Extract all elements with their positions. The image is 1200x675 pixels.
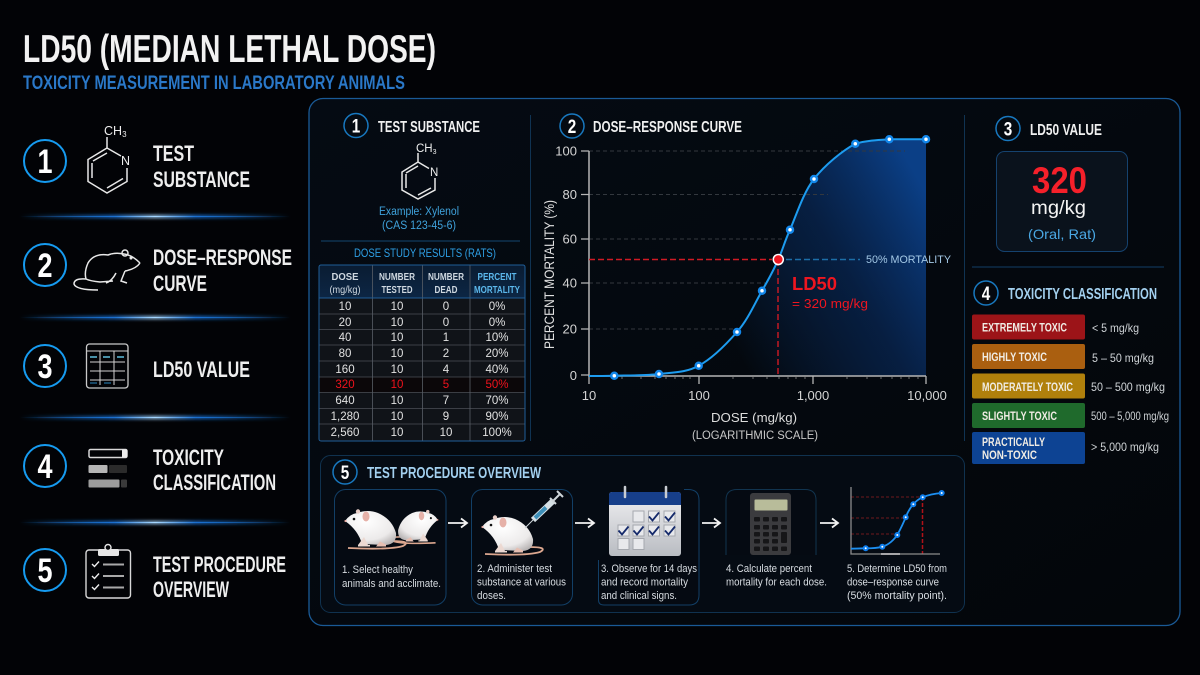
x axis labels (582, 388, 947, 403)
class: highly toxic: 5 – 50 mg/kg (1092, 351, 1154, 365)
icon: clipboard (86, 544, 130, 598)
dose study table: (mg/kg) (330, 284, 360, 296)
y axis labels: 60 (563, 232, 577, 246)
panel: dose-response curve (542, 114, 952, 442)
class: highly toxic (972, 344, 1154, 369)
dose study table: 20% (485, 348, 509, 360)
icon: molecule (88, 124, 130, 193)
step 2 (472, 490, 572, 605)
dose study table: 0% (489, 317, 505, 329)
panel: dose-response curve: 2 (568, 117, 576, 138)
class: slightly toxic (972, 403, 1169, 428)
step 5: (50% mortality point). (847, 590, 947, 602)
main panel (309, 98, 1180, 626)
y axis labels: 100 (555, 144, 577, 158)
class: practically non-toxic: PRACTICALLY (982, 435, 1045, 449)
dose study table: DOSE (332, 271, 358, 283)
substance caption: Example: Xylenol (379, 206, 459, 218)
dose study table: 320 (335, 379, 355, 391)
dose study table: 10 (391, 301, 403, 313)
dose study table: TESTED (382, 284, 413, 296)
class: practically non-toxic: > 5,000 mg/kg (1091, 440, 1159, 454)
panel: test procedure overview: TEST PROCEDURE OVERVIEW (367, 465, 542, 482)
y axis labels: 20 (563, 322, 577, 336)
icon: two rats (344, 509, 438, 549)
dose study table: 0 (443, 317, 449, 329)
sidebar item 1: test substance: TEST (153, 141, 194, 166)
dose study table: 640 (335, 395, 355, 407)
icon: rat with syringe (481, 491, 563, 555)
sidebar item 1: test substance: 1 (38, 143, 52, 181)
class: extremely toxic: < 5 mg/kg (1092, 321, 1139, 335)
step 3: and record mortality (601, 576, 688, 588)
dose study table: NUMBER (428, 271, 464, 283)
LD50 marker (773, 254, 783, 264)
icon: molecule: CH (104, 124, 122, 138)
class: moderately toxic: 50 – 500 mg/kg (1091, 380, 1165, 394)
title: LD50 (MEDIAN LETHAL DOSE) (23, 28, 436, 71)
panel: LD50 value (996, 116, 1128, 252)
arrow (820, 518, 838, 528)
sidebar item 3: LD50 value: 3 (38, 348, 52, 386)
icon: molecule: N (430, 167, 438, 179)
sidebar item 4: toxicity classification: TOXICITY (153, 445, 224, 470)
panel: test substance (319, 114, 525, 441)
dose study table: MORTALITY (474, 284, 520, 296)
panel: test procedure overview: 5 (341, 463, 350, 484)
sidebar item 2: dose-response curve (24, 244, 292, 296)
dose study table: 10 (391, 411, 403, 423)
icon: classification bars (88, 450, 127, 488)
dose study table: 0% (489, 301, 505, 313)
dose study table: 90% (485, 411, 509, 423)
step 2: doses. (477, 590, 506, 602)
LD50 guide lines (589, 260, 778, 376)
dose study table: 10 (391, 379, 403, 391)
data points (611, 136, 929, 379)
line chart: 50% MORTALITY (866, 254, 952, 266)
x axis labels: 1,000 (797, 388, 829, 403)
step 3: and clinical signs. (601, 590, 677, 602)
step 5: dose–response curve (847, 576, 939, 588)
step 4: mortality for each dose. (726, 576, 827, 588)
dose study table: 10 (391, 332, 403, 344)
step 4 (726, 490, 827, 588)
icon: molecule: CH (416, 143, 433, 155)
icon: molecule: 3 (122, 130, 127, 139)
sidebar item 1: test substance (24, 124, 250, 193)
step 2: substance at various (477, 576, 566, 588)
class: slightly toxic: SLIGHTLY TOXIC (982, 409, 1057, 423)
value card: mg/kg (1031, 198, 1086, 219)
dose study table: 10% (485, 332, 509, 344)
icon: molecule (402, 143, 438, 199)
panel: toxicity classification (972, 281, 1169, 464)
dose study table: 10 (339, 301, 351, 313)
dose study table: 4 (443, 364, 450, 376)
x axis labels: 100 (688, 388, 710, 403)
y axis labels: 80 (563, 187, 577, 202)
dose study table: 10 (391, 427, 403, 439)
dose study table: 1 (443, 332, 449, 344)
dose study table: 100% (482, 427, 512, 439)
sidebar: section list (24, 124, 292, 602)
dose study table: 160 (335, 364, 355, 376)
dose study table: 40 (339, 332, 351, 344)
sidebar item 5: test procedure overview: OVERVIEW (153, 577, 229, 602)
dose study table: 50% (485, 379, 509, 391)
line chart: DOSE (mg/kg) (711, 410, 797, 425)
y axis labels: 40 (563, 276, 577, 290)
panel: LD50 value: LD50 VALUE (1030, 122, 1102, 139)
dose study table: 70% (485, 395, 509, 407)
step 2: 2. Administer test (477, 563, 552, 575)
LD50 label: LD50 (792, 273, 837, 294)
y axis labels (555, 144, 577, 383)
dose-response curve line (589, 139, 926, 376)
class: extremely toxic: EXTREMELY TOXIC (982, 320, 1067, 334)
panel: test substance: DOSE STUDY RESULTS (RATS) (354, 246, 496, 260)
sidebar item 4: toxicity classification (24, 445, 276, 495)
subtitle: TOXICITY MEASUREMENT IN LABORATORY ANIMALS (23, 73, 405, 94)
step 5 (847, 487, 947, 602)
step 1: 1. Select healthy (342, 564, 413, 576)
sidebar item 5: test procedure overview: TEST PROCEDURE (153, 552, 286, 577)
value card (996, 152, 1128, 252)
sidebar item 5: test procedure overview (24, 544, 286, 602)
dose study table: PERCENT (478, 271, 517, 283)
icon: rat outline (74, 250, 140, 290)
class: practically non-toxic (972, 432, 1159, 464)
step 4: 4. Calculate percent (726, 563, 812, 575)
dose study table: NUMBER (379, 271, 415, 283)
step 3 (598, 487, 699, 605)
LD50 label (792, 273, 868, 311)
sidebar item 3: LD50 value: LD50 VALUE (153, 357, 250, 382)
mini chart (851, 487, 944, 554)
dose study table: 7 (443, 395, 449, 407)
dose study table: 10 (391, 395, 403, 407)
dose study table: 1,280 (331, 411, 359, 423)
substance caption (379, 206, 459, 232)
class: practically non-toxic: NON-TOXIC (982, 448, 1037, 462)
dose study table: 10 (391, 348, 403, 360)
step 1: animals and acclimate. (342, 578, 441, 590)
panel: test substance: 1 (352, 116, 361, 138)
x axis labels: 10 (582, 388, 596, 403)
arrow (448, 518, 467, 528)
dose study table: 10 (440, 427, 452, 439)
y axis labels: 0 (570, 368, 577, 383)
step 5: 5. Determine LD50 from (847, 563, 947, 575)
sidebar item 1: test substance: SUBSTANCE (153, 167, 250, 192)
x axis labels: 10,000 (907, 388, 947, 403)
sidebar item 2: dose-response curve: DOSE–RESPONSE (153, 245, 292, 270)
panel: test procedure overview (320, 456, 964, 612)
class: highly toxic: HIGHLY TOXIC (982, 350, 1047, 364)
icon: table (86, 344, 128, 388)
panel: dose-response curve: DOSE–RESPONSE CURVE (593, 119, 742, 136)
line chart (542, 136, 952, 442)
sidebar item 4: toxicity classification: CLASSIFICATION (153, 470, 276, 495)
LD50 label: = 320 mg/kg (792, 296, 868, 311)
sidebar item 2: dose-response curve: 2 (38, 247, 52, 285)
panel: toxicity classification: 4 (982, 284, 991, 305)
class: moderately toxic (972, 374, 1165, 398)
sidebar item 4: toxicity classification: 4 (38, 448, 53, 486)
value card: 320 (1032, 160, 1087, 201)
icon: molecule: N (121, 154, 130, 168)
icon: molecule: 3 (433, 149, 437, 156)
panel: test substance: TEST SUBSTANCE (378, 119, 480, 136)
sidebar item 2: dose-response curve: CURVE (153, 271, 207, 296)
class: extremely toxic (972, 314, 1139, 340)
class: moderately toxic: MODERATELY TOXIC (982, 380, 1073, 394)
dose study table: 0 (443, 301, 449, 313)
dose study table: DEAD (434, 284, 458, 296)
dose study table: 2,560 (331, 427, 359, 439)
arrow (575, 518, 594, 528)
step 3: 3. Observe for 14 days (601, 563, 697, 575)
dose study table: 20 (339, 317, 351, 329)
sidebar item 5: test procedure overview: 5 (38, 552, 52, 590)
icon: calculator (750, 493, 791, 555)
dose study table: 10 (391, 317, 403, 329)
class: slightly toxic: 500 – 5,000 mg/kg (1091, 409, 1169, 423)
line chart: PERCENT MORTALITY (%) (542, 200, 557, 349)
line chart: (LOGARITHMIC SCALE) (692, 430, 818, 442)
icon: calendar (609, 487, 681, 556)
panel: LD50 value: 3 (1004, 120, 1012, 140)
arrow (702, 518, 720, 528)
substance caption: (CAS 123-45-6) (382, 220, 456, 232)
dose study table: 80 (339, 348, 351, 360)
dose study table: 9 (443, 411, 449, 423)
dose study table: 2 (443, 348, 449, 360)
dose study table: 5 (443, 379, 449, 391)
dose study table: 10 (391, 364, 403, 376)
dose study table (319, 265, 525, 441)
dose study table: 40% (485, 364, 509, 376)
step 1 (334, 490, 446, 605)
sidebar item 3: LD50 value (24, 344, 250, 388)
value card: (Oral, Rat) (1028, 226, 1096, 242)
